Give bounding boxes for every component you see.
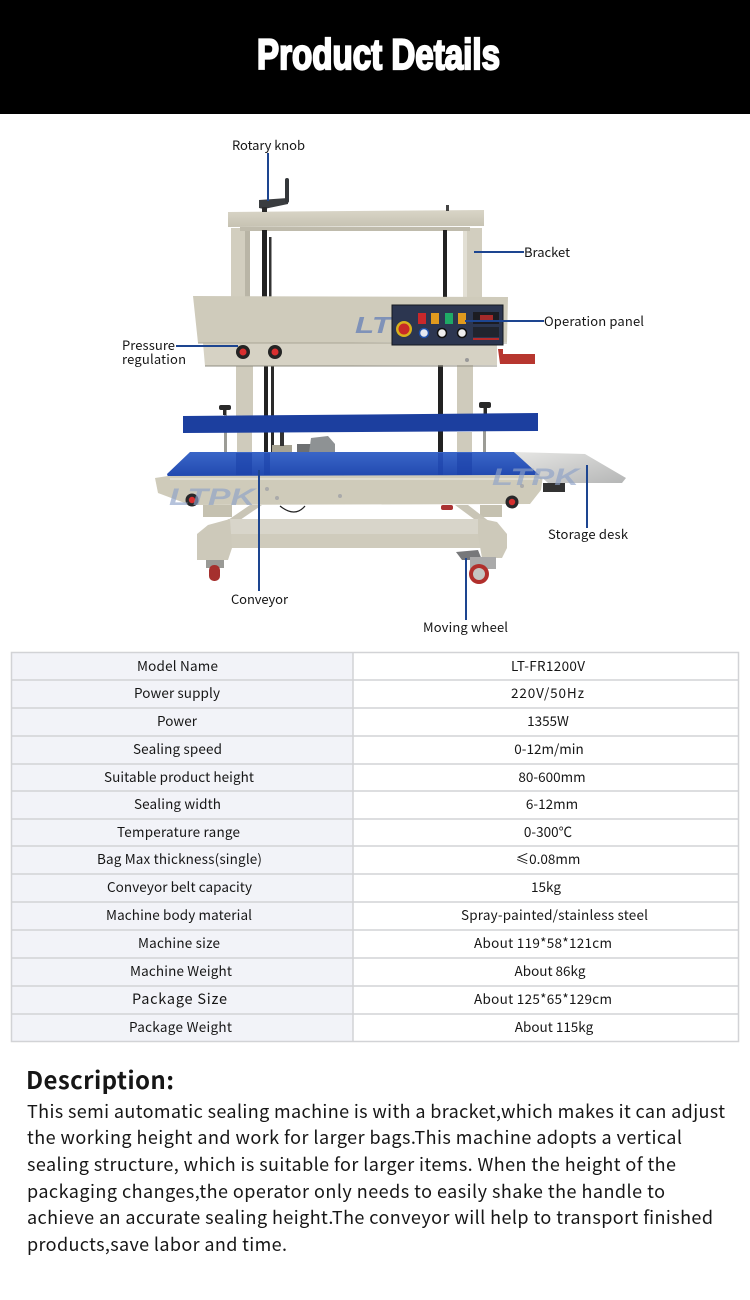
table left column labels: Suitable product height bbox=[104, 766, 254, 786]
callout: moving wheel: Moving wheel bbox=[423, 617, 508, 636]
table left column labels: Bag Max thickness(single) bbox=[97, 848, 262, 868]
callout: rotary knob bbox=[232, 135, 305, 201]
blue sealing bar bbox=[183, 413, 538, 433]
table right column values: 6-12mm bbox=[526, 793, 578, 813]
description text block: This semi automatic sealing machine is with a bracket,which makes it can adjust bbox=[27, 1098, 725, 1124]
description text block: products,save labor and time. bbox=[27, 1231, 287, 1257]
table left column labels: Machine Weight bbox=[130, 960, 232, 980]
callout: rotary knob: Rotary knob bbox=[232, 135, 305, 154]
conveyor belt bbox=[167, 452, 543, 477]
watermark on housing: LT bbox=[355, 312, 394, 338]
table right column values: 15kg bbox=[531, 876, 561, 896]
table right column values: 0-12m/min bbox=[514, 738, 584, 758]
sealing head housing bbox=[193, 296, 535, 366]
description text block bbox=[27, 1098, 725, 1257]
callout: operation panel: Operation panel bbox=[544, 311, 644, 330]
upper bracket frame bbox=[228, 205, 484, 298]
table left column labels bbox=[97, 655, 262, 1036]
table left column labels: Machine body material bbox=[106, 904, 252, 924]
table left column labels: Package Weight bbox=[129, 1016, 232, 1036]
base frame bbox=[197, 505, 507, 560]
table right column values: About 115kg bbox=[515, 1016, 594, 1036]
icon: pressure knobs bbox=[236, 345, 282, 359]
table right column values: 0-300℃ bbox=[524, 821, 572, 841]
description text block: sealing structure, which is suitable for larger items. When the height of the bbox=[27, 1151, 676, 1177]
table right column values: Spray-painted/stainless steel bbox=[461, 904, 648, 924]
table right column values: 220V/50Hz bbox=[511, 682, 585, 702]
table left column labels: Machine size bbox=[138, 932, 220, 952]
storage desk bbox=[514, 452, 626, 492]
table right column values bbox=[461, 655, 648, 1036]
table right column values: LT-FR1200V bbox=[511, 655, 585, 675]
title: Product Details bbox=[257, 31, 500, 79]
table left column labels: Sealing speed bbox=[133, 738, 222, 758]
operation panel bbox=[392, 305, 503, 345]
callout: pressure regulation bbox=[122, 335, 238, 368]
table right column values: About 119*58*121cm bbox=[474, 932, 612, 952]
table right column values: ≤0.08mm bbox=[516, 848, 580, 868]
specification table bbox=[11, 652, 739, 1042]
table right column values: 80-600mm bbox=[518, 766, 586, 786]
callout: pressure regulation: Pressure bbox=[122, 335, 175, 354]
description heading: Description: bbox=[26, 1061, 174, 1096]
watermarks bbox=[169, 464, 581, 511]
table left column labels: Power supply bbox=[134, 682, 220, 702]
table right column values: About 125*65*129cm bbox=[474, 988, 612, 1008]
table left column labels: Sealing width bbox=[134, 793, 221, 813]
conveyor frame bbox=[155, 475, 543, 517]
callout: conveyor bbox=[231, 470, 289, 608]
watermarks: LTPK bbox=[169, 484, 257, 511]
description text block: the working height and work for larger bags.This machine adopts a vertical bbox=[27, 1124, 682, 1150]
machine illustration bbox=[155, 178, 626, 584]
header banner bbox=[0, 0, 750, 114]
table left column labels: Temperature range bbox=[117, 821, 240, 841]
belt reflections bbox=[236, 453, 472, 475]
table left column labels: Model Name bbox=[137, 655, 218, 675]
table right column values: 1355W bbox=[527, 710, 569, 730]
table left column labels: Package Size bbox=[132, 988, 227, 1009]
callout: pressure regulation: regulation bbox=[122, 349, 186, 368]
table left column labels: Power bbox=[157, 710, 198, 730]
callout: conveyor: Conveyor bbox=[231, 589, 289, 608]
lower column legs bbox=[219, 364, 491, 454]
table right column values: About 86kg bbox=[515, 960, 586, 980]
callout: storage desk: Storage desk bbox=[548, 524, 629, 543]
callout: storage desk bbox=[548, 465, 629, 543]
icon: moving wheels bbox=[206, 550, 496, 584]
icon: rotary knob handle bbox=[259, 178, 289, 212]
callout: bracket bbox=[474, 242, 570, 261]
callout: moving wheel bbox=[423, 558, 508, 636]
callout: bracket: Bracket bbox=[524, 242, 570, 261]
motor bbox=[272, 432, 335, 453]
watermarks: LTPK bbox=[492, 464, 581, 491]
description text block: packaging changes,the operator only needs to easily shake the handle to bbox=[27, 1178, 665, 1204]
description text block: achieve an accurate sealing height.The conveyor will help to transport finished bbox=[27, 1204, 713, 1230]
table left column labels: Conveyor belt capacity bbox=[107, 876, 252, 896]
